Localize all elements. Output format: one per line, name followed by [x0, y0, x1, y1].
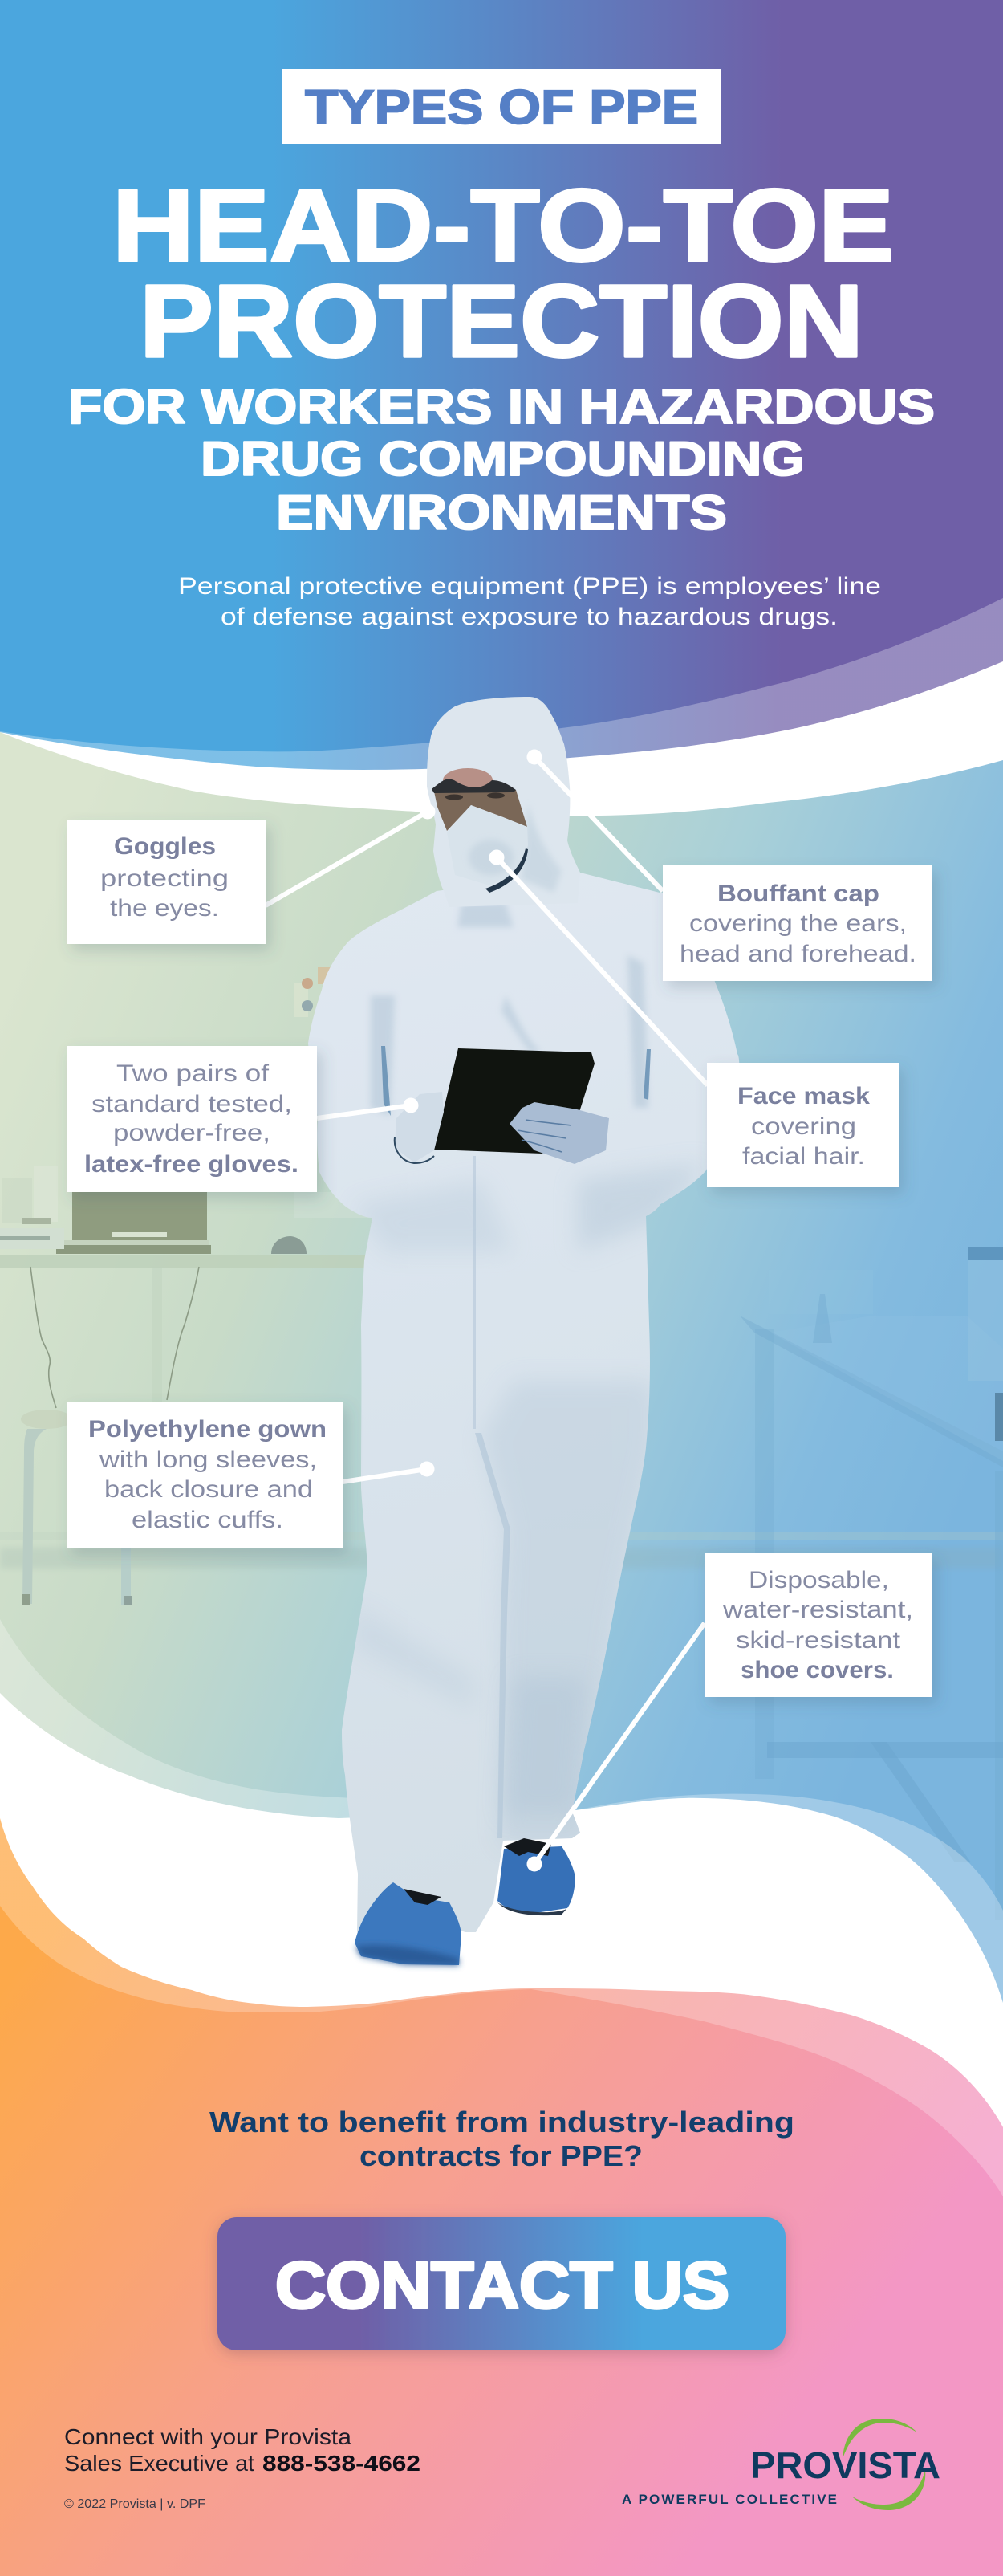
callout: shoe covers: Disposable,	[749, 1567, 889, 1593]
callout: polyethylene gown: back closure and	[104, 1476, 313, 1503]
callout: bouffant cap	[663, 865, 932, 981]
callout: polyethylene gown: Polyethylene gown	[88, 1416, 327, 1443]
right shoe black	[504, 1838, 551, 1856]
intro paragraph: Personal protective equipment (PPE) is employees’ line	[178, 573, 881, 600]
connector: gloves	[317, 1098, 419, 1118]
photo background: laboratory room	[0, 722, 1003, 2023]
contact details: 888-538-4662	[262, 2451, 420, 2476]
mask strap	[485, 848, 528, 893]
white wave below header	[0, 0, 1003, 816]
stool	[21, 1410, 132, 1605]
callout: gloves: Two pairs of	[116, 1060, 270, 1087]
callout: bouffant cap: covering the ears,	[689, 910, 907, 937]
tag: types of PPE	[282, 69, 721, 144]
footer gradient panel	[0, 1906, 1003, 2576]
callout: goggles	[67, 820, 266, 944]
subtitle: DRUG COMPOUNDING	[201, 432, 805, 486]
lower white wave translucent band	[0, 1619, 1003, 2248]
suit body	[308, 873, 739, 1932]
left shoe shade	[355, 1945, 459, 1965]
connector: bouffant cap	[526, 750, 663, 891]
left glove	[395, 1092, 444, 1162]
tablet	[434, 1048, 595, 1154]
connector: face mask	[489, 849, 708, 1085]
right shoe sole	[497, 1902, 566, 1915]
logo: Provista	[622, 2419, 940, 2510]
hood	[427, 697, 580, 907]
goggle lenses and face	[434, 790, 527, 831]
right glove	[510, 1102, 609, 1164]
intro paragraph	[178, 573, 881, 630]
suit creases	[381, 1046, 651, 1116]
callout: shoe covers	[705, 1553, 932, 1697]
contact details	[64, 2424, 420, 2476]
subtitle: FOR WORKERS IN HAZARDOUS	[68, 380, 935, 433]
callout: gloves: standard tested,	[91, 1091, 292, 1117]
call to action question: contracts for PPE?	[359, 2139, 643, 2172]
right shoe cover	[497, 1846, 575, 1913]
suit shading folds	[353, 903, 706, 1846]
connector: gown	[343, 1461, 435, 1482]
logo wordmark: PROVISTA	[750, 2444, 940, 2486]
callout: gloves: powder-free,	[113, 1120, 270, 1146]
connector: shoe covers	[526, 1623, 705, 1872]
logo tagline: A POWERFUL COLLECTIVE	[622, 2492, 837, 2507]
left desk with equipment	[0, 967, 417, 1411]
eyes	[445, 793, 505, 800]
callout: shoe covers: skid-resistant	[736, 1627, 901, 1654]
header light band	[0, 0, 1003, 770]
left glove cuff	[395, 1137, 434, 1163]
callout: goggles: protecting	[100, 865, 229, 892]
tag: types of PPE: TYPES OF PPE	[305, 80, 698, 134]
worker in protective suit	[308, 697, 739, 1965]
subtitle	[68, 380, 935, 539]
call to action question: Want to benefit from industry-leading	[209, 2106, 794, 2139]
skin forehead	[443, 768, 493, 792]
callout: bouffant cap: head and forehead.	[680, 941, 916, 967]
left shoe cover	[355, 1882, 461, 1965]
callout: polyethylene gown	[67, 1402, 343, 1548]
right glove finger lines	[518, 1120, 571, 1152]
callout: face mask: covering	[751, 1113, 856, 1140]
main title: PROTECTION	[140, 264, 863, 379]
callout: goggles: Goggles	[114, 833, 216, 860]
mask shadow	[469, 840, 514, 875]
intro paragraph: of defense against exposure to hazardous drugs.	[221, 604, 838, 630]
callout: gloves	[67, 1046, 317, 1192]
header gradient panel	[0, 0, 1003, 751]
callout: gloves: latex-free gloves.	[84, 1151, 298, 1178]
call to action question	[209, 2106, 794, 2172]
callout: polyethylene gown: elastic cuffs.	[132, 1507, 283, 1533]
button: contact us: CONTACT US	[275, 2248, 729, 2322]
hood shading	[522, 803, 562, 893]
copyright: © 2022 Provista | v. DPF	[64, 2497, 205, 2511]
main title	[112, 169, 894, 379]
footer light band	[0, 1818, 1003, 2576]
left shoe black	[404, 1889, 441, 1905]
callout: face mask	[707, 1063, 899, 1187]
contact details: Connect with your Provista	[64, 2424, 351, 2449]
callout: bouffant cap: Bouffant cap	[717, 881, 879, 907]
connector: goggles	[266, 804, 435, 905]
callout: shoe covers: water-resistant,	[722, 1597, 913, 1623]
right lab table	[740, 1247, 1003, 1920]
callout: face mask: facial hair.	[742, 1143, 865, 1170]
button: contact us	[217, 2217, 786, 2350]
lower white wave	[0, 1693, 1003, 2248]
face mask	[447, 805, 528, 885]
callout: shoe covers: shoe covers.	[741, 1657, 894, 1683]
callout: face mask: Face mask	[737, 1083, 870, 1109]
goggle frame	[432, 779, 516, 793]
callout: goggles: the eyes.	[110, 895, 219, 922]
main title: HEAD-TO-TOE	[112, 169, 894, 283]
logo green arcs	[843, 2419, 925, 2510]
callout: polyethylene gown: with long sleeves,	[99, 1447, 317, 1473]
floor skirting band	[0, 1532, 1003, 1569]
subtitle: ENVIRONMENTS	[276, 486, 727, 539]
connector lines and dots	[266, 750, 708, 1872]
contact details: Sales Executive at	[64, 2451, 254, 2476]
